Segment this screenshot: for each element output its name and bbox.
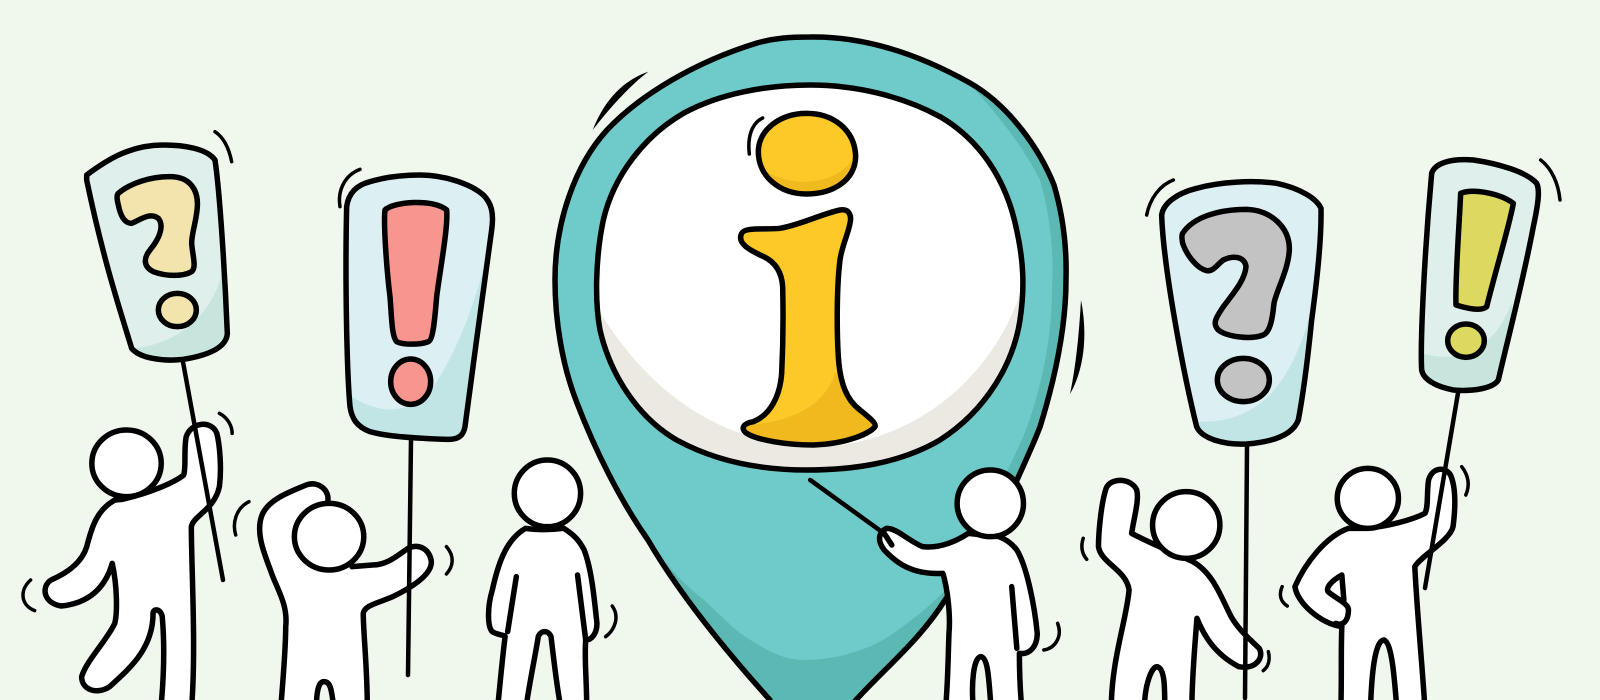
figure 5 waving bbox=[1082, 480, 1269, 700]
figures, right group bbox=[810, 467, 1468, 700]
letter i dot bbox=[757, 113, 860, 200]
sign: red exclamation mark bbox=[339, 169, 497, 443]
white disc bbox=[597, 85, 1023, 470]
disc outline bbox=[597, 85, 1023, 470]
sign: yellow question mark bbox=[87, 132, 237, 367]
pin shading bbox=[665, 88, 1064, 700]
figure 3 standing bbox=[489, 460, 616, 700]
map pin bbox=[555, 37, 1090, 700]
sign: grey question mark bbox=[1147, 180, 1323, 450]
figure 1 holding question sign bbox=[23, 413, 232, 700]
motion mark by pin bbox=[593, 72, 648, 130]
disc shadow bbox=[600, 294, 1020, 468]
letter i stem bbox=[740, 210, 880, 453]
info disc with letter i bbox=[592, 72, 1026, 473]
figure 2 scratching head bbox=[234, 484, 452, 700]
figure 6 hand on hip bbox=[1280, 467, 1468, 700]
motion mark right of pin bbox=[1070, 300, 1084, 394]
motion mark by i dot bbox=[749, 118, 763, 154]
figures, left group bbox=[23, 413, 616, 700]
sign: yellow-green exclamation mark bbox=[1417, 160, 1560, 397]
pointer stick bbox=[810, 480, 882, 532]
sign sticks bbox=[183, 362, 1458, 698]
figure 4 with pointer bbox=[880, 470, 1059, 700]
